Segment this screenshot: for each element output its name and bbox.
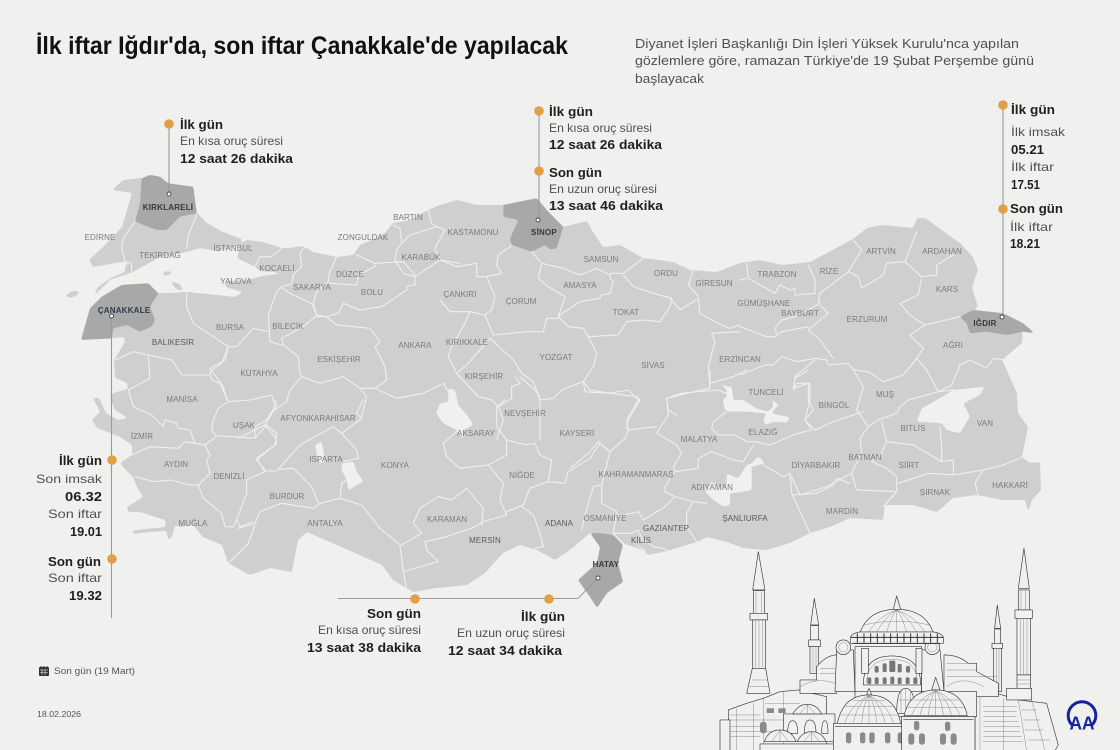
left walls [728, 690, 827, 750]
callout: Iğdır: İlk iftar [1011, 160, 1054, 174]
lake Tuz [436, 388, 473, 440]
callout: Çanakkale: İlk gün [59, 453, 102, 468]
callout: Çanakkale: 19.01 [70, 524, 102, 539]
province names: YALOVA [220, 277, 252, 286]
minaret 3 [992, 605, 1003, 692]
Kırklareli [135, 175, 197, 230]
province names: MARDİN [826, 507, 858, 516]
province names: KARS [936, 285, 958, 294]
province names: ADANA [545, 519, 574, 528]
date: 18.02.2026 [37, 709, 81, 719]
callout: Sinop: Son gün [549, 165, 602, 180]
intro text: Diyanet İşleri Başkanlığı Din İşleri Yüksek Kurulu'nca yapılan [635, 36, 1019, 51]
callout: Çanakkale: 06.32 [65, 489, 102, 504]
highlighted provinces [81, 175, 1035, 608]
callout: Kırklareli [164, 117, 294, 196]
side half domes [800, 655, 837, 693]
province names: IĞDIR [973, 319, 997, 328]
province names: NİĞDE [509, 471, 535, 480]
province names: KARAMAN [427, 515, 467, 524]
left small domes [760, 744, 835, 750]
province names: MUŞ [876, 390, 894, 399]
callout: Iğdır: İlk iftar [1010, 220, 1053, 234]
province names: ŞANLIURFA [722, 514, 768, 523]
province boundaries: northwest [122, 210, 460, 417]
province names: ZONGULDAK [338, 233, 389, 242]
illustration: Hagia Sophia [720, 548, 1058, 750]
Hatay [578, 533, 623, 608]
title: İlk iftar Iğdır'da, son iftar Çanakkale'de yapılacak [36, 32, 568, 60]
province boundaries: southeast [570, 370, 850, 555]
minaret 1 [747, 552, 770, 693]
province names: TUNCELİ [749, 388, 783, 397]
province names: KOCAELİ [259, 264, 295, 273]
callout: Iğdır: 18.21 [1010, 236, 1040, 251]
province names: BİTLİS [900, 424, 926, 433]
legend: last day: Son gün (19 Mart) [54, 666, 135, 677]
province names: DİYARBAKIR [792, 461, 841, 470]
province names: ARTVİN [866, 247, 896, 256]
province names: SİİRT [899, 461, 919, 470]
province names: KARABÜK [402, 253, 441, 262]
province names: ERZİNCAN [719, 355, 761, 364]
front dome right [902, 677, 975, 750]
province names: OSMANİYE [583, 514, 627, 523]
callout: Antalya and Hatay [307, 576, 600, 658]
province names [85, 203, 1028, 569]
province names: RİZE [820, 267, 838, 276]
logo: AA: AA [1070, 714, 1094, 734]
map of Turkey [65, 175, 1041, 608]
province names: MUĞLA [179, 519, 208, 528]
province names: ERZURUM [847, 315, 888, 324]
intro text [635, 36, 1034, 86]
main building [855, 647, 922, 693]
province names: KÜTAHYA [240, 369, 278, 378]
province names: İSTANBUL [213, 244, 253, 253]
callout: Çanakkale [36, 314, 117, 618]
land silhouette [65, 175, 1041, 592]
province names: HATAY [593, 560, 620, 569]
callout: Antalya and Hatay: 12 saat 34 dakika [448, 643, 563, 658]
callout: Çanakkale: Son imsak [36, 472, 103, 486]
callout: Antalya and Hatay: 13 saat 38 dakika [307, 640, 422, 655]
province names: BURDUR [270, 492, 305, 501]
callout: Sinop: En uzun oruç süresi [549, 182, 657, 196]
province names: GAZİANTEP [643, 524, 689, 533]
Çanakkale [81, 283, 158, 340]
province names: KONYA [381, 461, 410, 470]
mid left block [783, 714, 835, 742]
province names: KAYSERİ [560, 429, 594, 438]
callout: Sinop: En kısa oruç süresi [549, 121, 652, 135]
Iğdır [960, 310, 1035, 335]
callout: Sinop: İlk gün [549, 104, 593, 119]
lake Keban [717, 380, 790, 425]
province names: GİRESUN [695, 279, 733, 288]
callout: Iğdır [998, 100, 1066, 319]
province names: AYDIN [164, 460, 188, 469]
province names: BİLECİK [272, 322, 304, 331]
province names: YOZGAT [540, 353, 572, 362]
province names: MANİSA [166, 395, 198, 404]
callout: Iğdır: Son gün [1010, 201, 1063, 216]
province names: BATMAN [848, 453, 882, 462]
province names: ÇORUM [506, 297, 537, 306]
lake Van [917, 387, 985, 433]
province names: NEVŞEHİR [504, 409, 546, 418]
callout: Sinop: 13 saat 46 dakika [549, 198, 664, 213]
callout: Iğdır: 17.51 [1011, 177, 1040, 192]
province boundaries: northeast and east [740, 232, 1023, 507]
province names: ADIYAMAN [691, 483, 733, 492]
province names: SAMSUN [584, 255, 619, 264]
province names: ŞIRNAK [920, 488, 951, 497]
province boundaries: central south [228, 400, 610, 590]
callout: Sinop: 12 saat 26 dakika [549, 137, 663, 152]
callout: Çanakkale: Son iftar [48, 507, 102, 521]
province names: KAHRAMANMARAŞ [598, 470, 674, 479]
province names: KIRKLARELİ [143, 203, 193, 212]
province names: KİLİS [631, 536, 651, 545]
province names: ANTALYA [307, 519, 343, 528]
callout: Kırklareli: En kısa oruç süresi [180, 134, 283, 148]
province names: MALATYA [681, 435, 718, 444]
callout: Çanakkale: Son iftar [48, 571, 102, 585]
minaret 4 [1007, 548, 1032, 700]
callout: Kırklareli: İlk gün [180, 117, 223, 132]
province names: İZMİR [131, 432, 153, 441]
front dome left [833, 688, 905, 750]
province names: SİVAS [641, 361, 665, 370]
icon: calendar [39, 666, 49, 676]
main dome [851, 596, 943, 643]
province names: AFYONKARAHİSAR [280, 414, 356, 423]
province boundaries: Aegean [115, 347, 277, 527]
province names: AĞRI [943, 341, 963, 350]
intro text: gözlemlere göre, ramazan Türkiye'de 19 Şubat Perşembe günü [635, 53, 1034, 68]
right buttress [922, 650, 944, 692]
province names: UŞAK [233, 421, 256, 430]
intro text: başlayacak [635, 71, 705, 86]
province names: BARTIN [393, 213, 423, 222]
province names: ARDAHAN [922, 247, 962, 256]
province names: DENİZLİ [213, 472, 245, 481]
province names: ISPARTA [309, 455, 343, 464]
province names: ORDU [654, 269, 678, 278]
callout: Antalya and Hatay: İlk gün [521, 609, 565, 624]
lakes [315, 380, 985, 507]
province names: TEKİRDAĞ [139, 251, 181, 260]
province names: KIRIKKALE [446, 338, 488, 347]
lake Eğirdir [315, 442, 325, 463]
province names: AMASYA [563, 281, 597, 290]
province names: BURSA [216, 323, 245, 332]
province names: BAYBURT [781, 309, 819, 318]
province names: ELAZIĞ [748, 428, 778, 437]
province names: KASTAMONU [448, 228, 499, 237]
callout: Iğdır: İlk imsak [1011, 125, 1066, 139]
logo: AA [1068, 702, 1096, 734]
province names: SİNOP [531, 228, 557, 237]
province names: ANKARA [398, 341, 432, 350]
province names: BOLU [361, 288, 383, 297]
callout: Iğdır: 05.21 [1011, 142, 1044, 157]
callout: Antalya and Hatay: En uzun oruç süresi [457, 626, 565, 640]
province names: SAKARYA [293, 283, 331, 292]
province names: ÇANAKKALE [98, 306, 151, 315]
province names: BİNGÖL [819, 401, 850, 410]
province names: TOKAT [613, 308, 639, 317]
minaret 2 [809, 598, 820, 673]
province names: VAN [977, 419, 993, 428]
province names: HAKKARİ [992, 481, 1028, 490]
province boundaries: north central [440, 246, 740, 440]
callout: Çanakkale: 19.32 [69, 588, 102, 603]
lake Beyşehir [342, 462, 363, 491]
province names: EDİRNE [85, 233, 115, 242]
province names: TRABZON [758, 270, 797, 279]
right walls [975, 687, 1058, 750]
callout: Çanakkale: Son gün [48, 554, 101, 569]
province names: KIRŞEHİR [465, 372, 503, 381]
province names: DÜZCE [336, 270, 364, 279]
province names: BALIKESİR [152, 338, 194, 347]
callout: Iğdır: İlk gün [1011, 102, 1055, 117]
callout: Sinop [534, 104, 664, 222]
lake Atatürk [705, 456, 765, 507]
province names: AKSARAY [457, 429, 496, 438]
province names: MERSİN [469, 536, 501, 545]
callout: Antalya and Hatay: Son gün [367, 606, 421, 621]
left buttress [835, 650, 855, 692]
callout: Antalya and Hatay: En kısa oruç süresi [318, 623, 421, 637]
province names: GÜMÜŞHANE [738, 299, 790, 308]
province names: ESKİŞEHİR [317, 355, 361, 364]
province names: ÇANKIRI [443, 290, 477, 299]
callout: Kırklareli: 12 saat 26 dakika [180, 151, 294, 166]
Sinop [503, 198, 563, 252]
